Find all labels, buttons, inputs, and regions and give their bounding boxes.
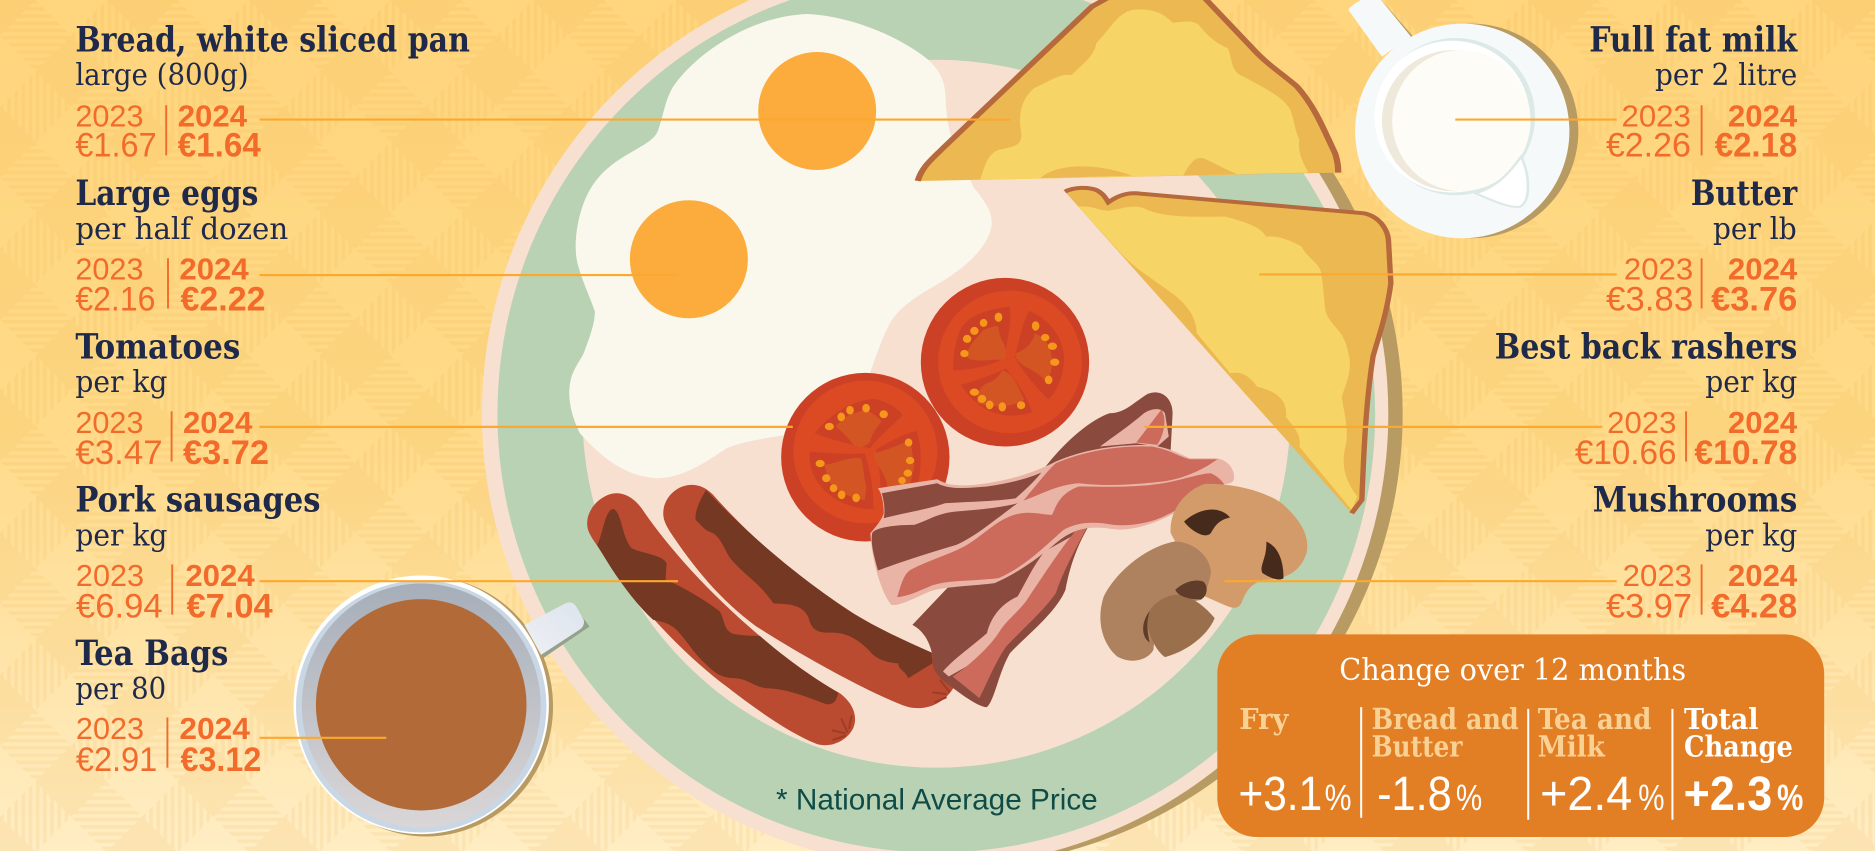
tomato: right [921, 278, 1089, 447]
column: tea and milk: Milk [1538, 729, 1605, 764]
item: tea bags [75, 633, 261, 779]
item: tomatoes [75, 326, 269, 472]
item: rashers [1495, 326, 1797, 472]
tomatoes prices: 2023 [75, 406, 143, 440]
milk prices: €2.26 [1606, 127, 1691, 165]
tomatoes prices [75, 406, 269, 472]
toast: top slice [918, 0, 1338, 181]
column: total change: +2.3 [1684, 768, 1772, 821]
cup shadow [529, 606, 590, 658]
sausages prices: 2023 [76, 559, 144, 593]
column: bread and butter: -1.8 [1377, 768, 1452, 821]
column: total change: % [1777, 778, 1803, 818]
sausages prices [76, 559, 273, 626]
column: total change [1684, 701, 1803, 821]
toast: lower slice [1065, 188, 1391, 513]
mushrooms prices: 2024 [1728, 559, 1797, 593]
milk unit: per 2 litre [1655, 58, 1797, 93]
bread prices: €1.67 [75, 127, 157, 165]
column: fry: +3.1 [1238, 768, 1322, 821]
rashers prices: 2024 [1728, 406, 1797, 440]
mushrooms title: Mushrooms [1593, 480, 1797, 521]
mushrooms prices [1606, 559, 1797, 626]
eggs prices [75, 252, 265, 319]
tomato: left [781, 373, 950, 542]
rasher: front [870, 445, 1234, 605]
rashers prices: 2023 [1607, 406, 1676, 440]
eggs prices: €2.22 [181, 281, 265, 319]
eggs prices: €2.16 [75, 281, 155, 319]
column: total change: Change [1684, 729, 1793, 764]
eggs prices: 2024 [179, 252, 249, 286]
rashers prices: €10.66 [1575, 434, 1676, 472]
column: bread and butter: Butter [1372, 729, 1463, 764]
sausage: right [663, 485, 953, 708]
rashers prices [1575, 406, 1797, 472]
sausages title: Pork sausages [75, 480, 320, 521]
butter prices: 2023 [1624, 252, 1693, 286]
butter unit: per lb [1713, 212, 1797, 247]
milk surface [1392, 50, 1531, 191]
mushroom: back [1100, 542, 1215, 661]
milk prices [1606, 100, 1797, 165]
bread prices: €1.64 [178, 127, 261, 165]
leader lines [259, 120, 1617, 738]
column: fry: Fry [1239, 701, 1289, 736]
butter prices: €3.76 [1711, 281, 1797, 319]
yolk: upper [758, 52, 876, 170]
eggs prices: 2023 [75, 252, 143, 286]
yolk: lower [630, 200, 748, 318]
sausage: left [587, 493, 855, 745]
tea title: Tea Bags [75, 633, 228, 674]
column: bread and butter [1372, 701, 1519, 821]
item: sausages [75, 480, 320, 626]
panel: change over 12 months [1217, 634, 1824, 837]
tomatoes prices: €3.72 [183, 434, 269, 472]
rashers prices: €10.78 [1694, 434, 1797, 472]
panel heading: Change over 12 months [1339, 653, 1686, 688]
tea prices: 2023 [76, 712, 144, 746]
tea cup [294, 576, 590, 836]
jug inner rim [1376, 38, 1535, 195]
item: eggs [75, 173, 288, 319]
column: bread and butter: % [1456, 778, 1482, 818]
rashers title: Best back rashers [1495, 326, 1797, 367]
tea prices: 2024 [179, 712, 250, 746]
tomatoes unit: per kg [75, 365, 167, 400]
item: bread [75, 20, 470, 165]
item: mushrooms [1593, 480, 1797, 626]
column: tea and milk [1538, 701, 1665, 821]
column: total change: Total [1684, 701, 1759, 736]
sausages prices: €7.04 [187, 588, 273, 626]
butter prices [1606, 252, 1797, 319]
mushrooms prices: €4.28 [1711, 588, 1797, 626]
fried eggs [569, 14, 992, 478]
milk prices: 2024 [1728, 100, 1797, 134]
item: milk [1589, 20, 1799, 165]
bread prices [75, 100, 261, 165]
cup handle [524, 602, 584, 655]
column: fry: % [1325, 778, 1351, 818]
milk prices: 2023 [1621, 100, 1691, 134]
sausages prices: €6.94 [76, 588, 163, 626]
footnote: * National Average Price [776, 784, 1098, 817]
tomatoes prices: €3.47 [75, 434, 163, 472]
tomatoes [781, 278, 1089, 542]
jug body [1355, 24, 1569, 238]
tomatoes title: Tomatoes [75, 326, 240, 367]
sausages unit: per kg [75, 518, 167, 553]
bread prices: 2023 [75, 100, 143, 134]
column: fry [1238, 701, 1351, 821]
column: bread and butter: Bread and [1372, 701, 1519, 736]
column: tea and milk: +2.4 [1540, 768, 1632, 821]
milk prices: €2.18 [1715, 127, 1797, 165]
butter prices: €3.83 [1606, 281, 1693, 319]
item: butter [1606, 173, 1798, 319]
eggs title: Large eggs [75, 173, 258, 214]
mushrooms prices: €3.97 [1606, 588, 1692, 626]
tea prices [76, 712, 261, 779]
mushrooms prices: 2023 [1623, 559, 1692, 593]
mushrooms [1100, 484, 1307, 661]
jug shadow [1364, 0, 1578, 238]
bread title: Bread, white sliced pan [75, 20, 470, 61]
bread prices: 2024 [178, 100, 247, 134]
eggs unit: per half dozen [75, 212, 288, 247]
jug spout [1476, 157, 1528, 207]
sausages prices: 2024 [185, 559, 255, 593]
column: tea and milk: % [1638, 778, 1665, 818]
egg white [569, 14, 992, 478]
tea prices: €3.12 [181, 741, 261, 779]
sausages [587, 485, 953, 745]
rasher: back [912, 392, 1173, 707]
mushroom: front [1171, 484, 1307, 608]
mushrooms unit: per kg [1705, 518, 1797, 553]
bread unit: large (800g) [75, 58, 249, 93]
cup rim [294, 576, 549, 834]
cup interior [302, 584, 541, 827]
bacon rashers [870, 392, 1234, 707]
butter title: Butter [1691, 173, 1798, 214]
plate [482, 0, 1403, 851]
tea [316, 599, 527, 810]
butter prices: 2024 [1728, 252, 1797, 286]
tea unit: per 80 [75, 672, 166, 707]
tomatoes prices: 2024 [183, 406, 252, 440]
milk jug [1348, 0, 1578, 238]
tea prices: €2.91 [76, 741, 157, 779]
jug handle [1348, 0, 1411, 57]
column: tea and milk: Tea and [1538, 701, 1651, 736]
milk title: Full fat milk [1589, 20, 1799, 61]
rashers unit: per kg [1705, 365, 1797, 400]
